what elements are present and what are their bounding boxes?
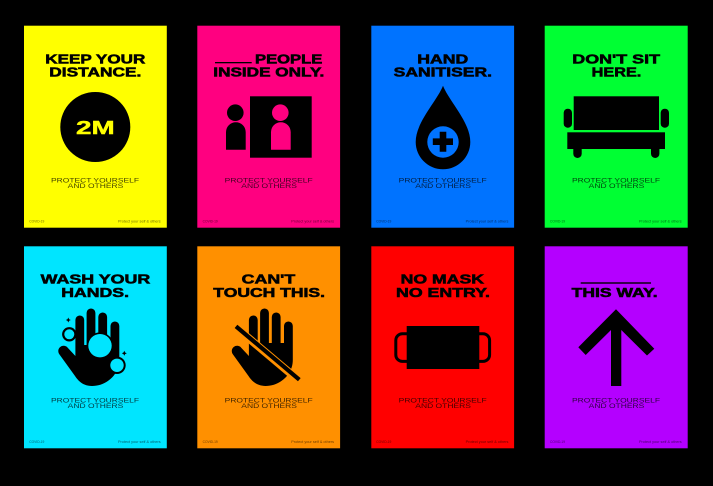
poster: keep your distance <box>24 26 167 228</box>
text: protect yourself: PROTECT YOURSELF <box>572 178 660 184</box>
footer <box>29 219 161 223</box>
footer <box>203 440 334 444</box>
footer: COVID-19 <box>29 440 45 444</box>
text: protect yourself <box>399 178 487 190</box>
footer: COVID-19 <box>203 219 218 223</box>
icon: face mask <box>396 326 490 369</box>
heading: keep your distance: DISTANCE. <box>49 65 141 80</box>
icon: up arrow <box>578 309 654 386</box>
icon: 2M circle <box>60 92 130 162</box>
footer: Protect your self & others <box>466 219 509 223</box>
text: protect yourself: AND OTHERS <box>68 404 123 410</box>
footer: COVID-19 <box>550 440 565 444</box>
heading: keep your distance: KEEP YOUR <box>45 51 145 66</box>
heading: people inside only: INSIDE ONLY. <box>213 65 324 80</box>
text: protect yourself <box>572 398 660 410</box>
footer: Protect your self & others <box>291 219 334 223</box>
heading: this way: THIS WAY. <box>572 285 658 300</box>
footer: COVID-19 <box>29 219 45 223</box>
text: protect yourself: PROTECT YOURSELF <box>572 398 660 404</box>
text: protect yourself: PROTECT YOURSELF <box>225 178 313 184</box>
poster: hand sanitiser <box>371 26 514 228</box>
icon: crossed-out hand <box>232 308 299 386</box>
icon: couch <box>564 96 669 158</box>
footer: COVID-19 <box>376 219 392 223</box>
text: protect yourself: AND OTHERS <box>241 404 297 410</box>
footer: Protect your self & others <box>639 440 682 444</box>
footer: COVID-19 <box>203 440 218 444</box>
footer: COVID-19 <box>376 440 392 444</box>
footer <box>376 219 509 223</box>
icon: 2M circle: 2M <box>76 117 115 138</box>
footer <box>550 219 682 223</box>
text: protect yourself: PROTECT YOURSELF <box>399 178 487 184</box>
footer: Protect your self & others <box>466 440 509 444</box>
poster: don't sit here <box>545 26 688 228</box>
heading: hand sanitiser: HAND <box>417 51 468 66</box>
heading: people inside only <box>213 51 324 80</box>
poster: wash your hands <box>24 246 167 448</box>
heading: people inside only: PEOPLE <box>255 51 323 66</box>
footer <box>29 440 161 444</box>
heading: wash your hands: HANDS. <box>61 285 129 300</box>
footer <box>203 219 334 223</box>
footer: Protect your self & others <box>118 219 161 223</box>
heading: no mask no entry: NO ENTRY. <box>396 285 490 300</box>
text: protect yourself: PROTECT YOURSELF <box>51 178 139 184</box>
icon: sanitiser drop <box>416 86 470 169</box>
heading: keep your distance <box>45 51 145 80</box>
text: protect yourself: AND OTHERS <box>68 184 123 190</box>
heading: no mask no entry <box>396 272 490 300</box>
heading: wash your hands: WASH YOUR <box>41 272 150 286</box>
text: protect yourself <box>399 398 487 410</box>
text: protect yourself <box>225 398 313 410</box>
text: protect yourself: AND OTHERS <box>589 404 644 410</box>
heading: hand sanitiser <box>394 51 492 80</box>
footer: Protect your self & others <box>291 440 334 444</box>
poster: can't touch this <box>197 246 340 448</box>
poster: people inside only <box>197 26 340 228</box>
text: protect yourself: PROTECT YOURSELF <box>399 398 487 404</box>
poster: no mask no entry <box>371 246 514 448</box>
heading: can't touch this: CAN'T <box>242 272 296 286</box>
footer <box>550 440 682 444</box>
heading: can't touch this: TOUCH THIS. <box>213 285 325 300</box>
text: protect yourself <box>225 178 313 190</box>
heading: don't sit here: DON'T SIT <box>572 51 660 66</box>
heading: this way <box>572 282 658 300</box>
poster: this way <box>545 246 688 448</box>
heading: don't sit here <box>572 51 660 80</box>
footer: COVID-19 <box>550 219 565 223</box>
text: protect yourself: PROTECT YOURSELF <box>51 398 139 404</box>
heading: hand sanitiser: SANITISER. <box>394 65 492 80</box>
text: protect yourself <box>51 178 139 190</box>
icon: people and room <box>226 96 312 158</box>
text: protect yourself: AND OTHERS <box>415 184 471 190</box>
text: protect yourself <box>572 178 660 190</box>
text: protect yourself: AND OTHERS <box>415 404 471 410</box>
footer: Protect your self & others <box>639 219 682 223</box>
heading: no mask no entry: NO MASK <box>401 272 485 286</box>
heading: don't sit here: HERE. <box>592 65 641 80</box>
heading: can't touch this <box>213 272 325 300</box>
icon: soapy hand <box>58 308 127 386</box>
text: protect yourself <box>51 398 139 410</box>
footer: Protect your self & others <box>118 440 161 444</box>
heading: wash your hands <box>41 272 150 300</box>
footer <box>376 440 509 444</box>
text: protect yourself: AND OTHERS <box>241 184 297 190</box>
text: protect yourself: PROTECT YOURSELF <box>225 398 313 404</box>
text: protect yourself: AND OTHERS <box>589 184 644 190</box>
